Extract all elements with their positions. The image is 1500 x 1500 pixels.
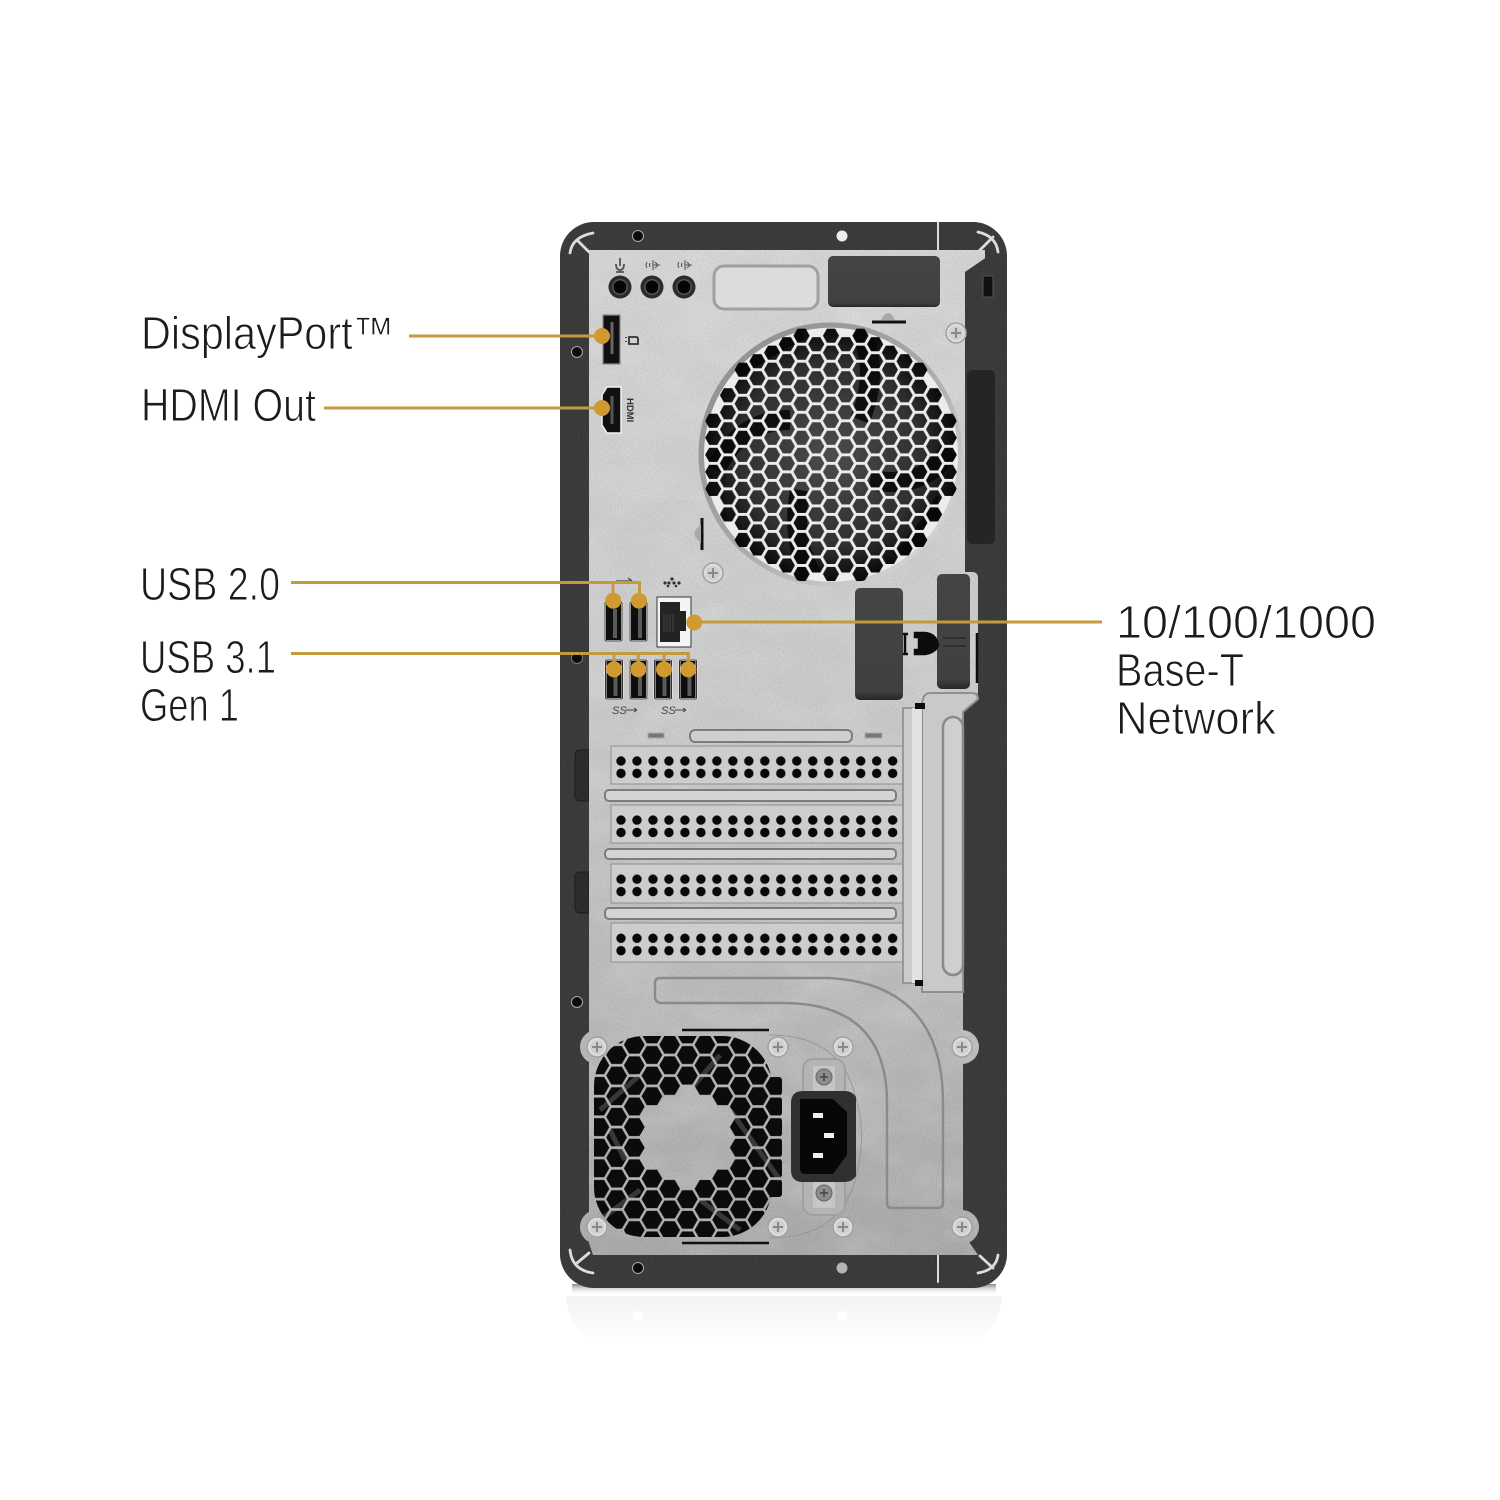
dark case body (560, 222, 1007, 1288)
USB 2.0 ports (605, 578, 647, 641)
vent dot rows (613, 755, 901, 957)
case holes (572, 230, 848, 1274)
icon: audio symbols (646, 260, 692, 270)
callout: USB 2.0: USB 2.0 (140, 558, 280, 610)
callout: USB 2.0 (140, 558, 647, 610)
SS USB labels: SS (612, 705, 627, 717)
expansion slots (605, 730, 903, 962)
silver metal panel (575, 245, 985, 1260)
USB 3.1 ports (606, 660, 696, 717)
PSU screws (587, 1037, 972, 1237)
callout: USB 3.1 Gen 1: Gen 1 (140, 679, 239, 731)
power supply (585, 978, 972, 1245)
callout: DisplayPort (141, 307, 610, 359)
case texture (560, 222, 1007, 1288)
rubber feet and latch (855, 574, 977, 700)
USB symbols (626, 708, 686, 712)
callout: network: Base-T (1116, 644, 1244, 696)
side grip recess (967, 370, 995, 544)
shadow under tower (572, 1284, 996, 1295)
audio jacks (608, 258, 696, 298)
top rubber foot (828, 256, 940, 322)
icon: USB trident (616, 578, 632, 584)
DisplayPort connector (603, 315, 638, 364)
lock slot (983, 276, 993, 297)
power inlet bracket (803, 1059, 845, 1215)
callout: network: 10/100/1000 (1116, 596, 1376, 648)
small slots (648, 733, 664, 738)
second SS USB label: SS (661, 705, 676, 717)
right slot bracket (903, 693, 978, 992)
label recess (714, 266, 818, 309)
small bracket mark by fan (694, 518, 702, 550)
slot plates (611, 746, 903, 962)
case seams and corner marks (570, 222, 998, 1282)
callout: DisplayPort: DisplayPort™ (141, 307, 394, 359)
callout: network (686, 596, 1376, 744)
HDMI port label: HDMI (624, 398, 635, 422)
HDMI connector (602, 387, 635, 433)
icon: microphone (616, 258, 624, 272)
icon: DisplayPort mark (626, 337, 638, 344)
callout: USB 3.1 Gen 1 (140, 631, 696, 731)
tower rear chassis (560, 222, 1007, 1295)
rear fan grille (698, 322, 962, 586)
left side notches (575, 750, 589, 913)
PSU outline (769, 1035, 862, 1238)
callout: network: Network (1116, 692, 1277, 744)
floor reflection of tower (566, 1296, 1002, 1345)
divider pills (605, 730, 896, 919)
fan holes (701, 325, 961, 585)
AC power inlet (791, 1091, 856, 1182)
PSU fan vent bars (682, 1030, 769, 1243)
callout: USB 3.1 Gen 1: USB 3.1 (140, 631, 276, 683)
callout: HDMI Out (141, 379, 610, 431)
RJ45 network port (657, 597, 691, 647)
PSU fan grille (594, 1036, 782, 1237)
network icon (663, 577, 681, 587)
air duct rib (655, 978, 943, 1208)
bracket screws (813, 1066, 835, 1208)
callout: HDMI Out: HDMI Out (141, 379, 316, 431)
panel screws (703, 323, 966, 583)
